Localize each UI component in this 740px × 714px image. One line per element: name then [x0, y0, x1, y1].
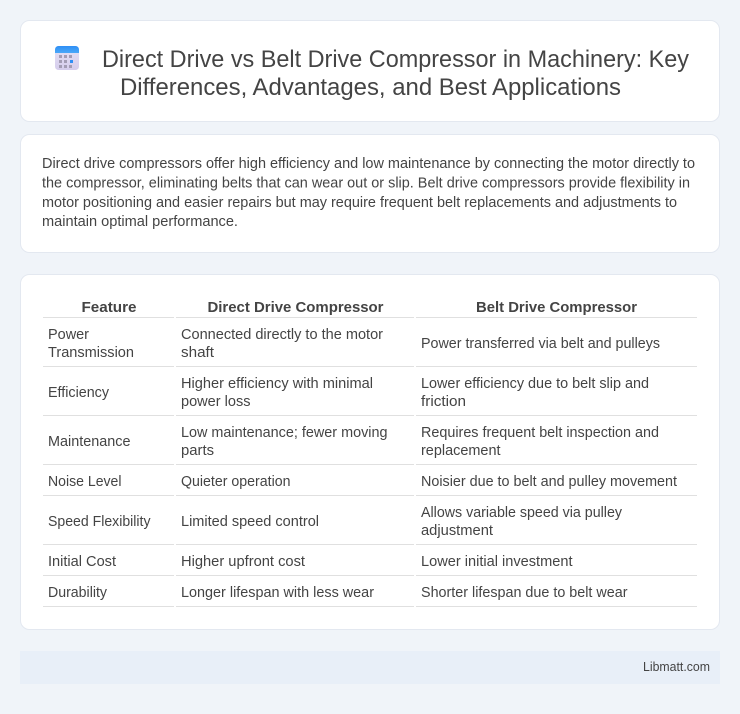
- row: power transmission: Connected directly to the motor: [181, 327, 383, 343]
- row: noise level: Noise Level: [48, 474, 122, 490]
- row: speed flexibility: Allows variable speed via pulley: [421, 505, 623, 521]
- panel: introduction: [20, 134, 720, 252]
- row: power transmission: Transmission: [48, 345, 134, 361]
- row: efficiency: friction: [421, 394, 466, 410]
- footer: Libmatt.com: [643, 660, 710, 674]
- text block: introduction paragraph: maintain optimal performance.: [42, 214, 238, 230]
- panel: comparison table: [20, 274, 720, 630]
- row: power transmission: Power: [48, 327, 89, 343]
- text block: introduction paragraph: motor positioning and easier repairs but may require frequent belt replacements and adjustments to: [42, 195, 677, 211]
- row: efficiency: Efficiency: [48, 385, 110, 401]
- row: speed flexibility: adjustment: [421, 523, 493, 539]
- row: efficiency: [48, 376, 649, 410]
- row: efficiency: Higher efficiency with minimal: [181, 376, 373, 392]
- text block: introduction paragraph: Direct drive compressors offer high efficiency and low maintenance by connecting the motor directly to: [42, 156, 695, 172]
- table header: Belt Drive Compressor: [476, 299, 637, 316]
- row: speed flexibility: [48, 505, 623, 539]
- row: initial cost: Higher upfront cost: [181, 554, 305, 570]
- row: power transmission: shaft: [181, 345, 214, 361]
- text block: introduction paragraph: the compressor, eliminating belts that can wear out or slip. Belt drive compressors provide flexibility in: [42, 176, 690, 192]
- title: Differences, Advantages, and Best Applications: [120, 74, 621, 101]
- row: maintenance: replacement: [421, 443, 500, 459]
- row: maintenance: [48, 425, 659, 459]
- row: speed flexibility: Speed Flexibility: [48, 514, 151, 530]
- footer: [20, 651, 720, 684]
- row: durability: Longer lifespan with less wear: [181, 585, 374, 601]
- row: noise level: [48, 474, 677, 490]
- text block: introduction paragraph: [42, 156, 695, 230]
- title: [102, 46, 689, 101]
- row: durability: [48, 585, 628, 601]
- table header: Feature: [82, 299, 136, 316]
- row: initial cost: Lower initial investment: [421, 554, 572, 570]
- row: efficiency: power loss: [181, 394, 250, 410]
- row: initial cost: [48, 554, 572, 570]
- row: efficiency: Lower efficiency due to belt slip and: [421, 376, 649, 392]
- row: maintenance: Low maintenance; fewer moving: [181, 425, 388, 441]
- row: noise level: Quieter operation: [181, 474, 290, 490]
- row: maintenance: Maintenance: [48, 434, 130, 450]
- row: durability: Durability: [48, 585, 108, 601]
- table header: Direct Drive Compressor: [208, 299, 384, 316]
- row: durability: Shorter lifespan due to belt wear: [421, 585, 628, 601]
- title: Direct Drive vs Belt Drive Compressor in Machinery: Key: [102, 46, 689, 73]
- table header: [82, 299, 637, 316]
- row: noise level: Noisier due to belt and pulley movement: [421, 474, 677, 490]
- row: power transmission: Power transferred via belt and pulleys: [421, 336, 660, 352]
- icon: calendar grid: [55, 46, 79, 70]
- row: initial cost: Initial Cost: [48, 554, 116, 570]
- row: speed flexibility: Limited speed control: [181, 514, 319, 530]
- row: power transmission: [48, 327, 660, 361]
- row: maintenance: parts: [181, 443, 214, 459]
- panel: title card: [20, 20, 720, 122]
- row: maintenance: Requires frequent belt inspection and: [421, 425, 659, 441]
